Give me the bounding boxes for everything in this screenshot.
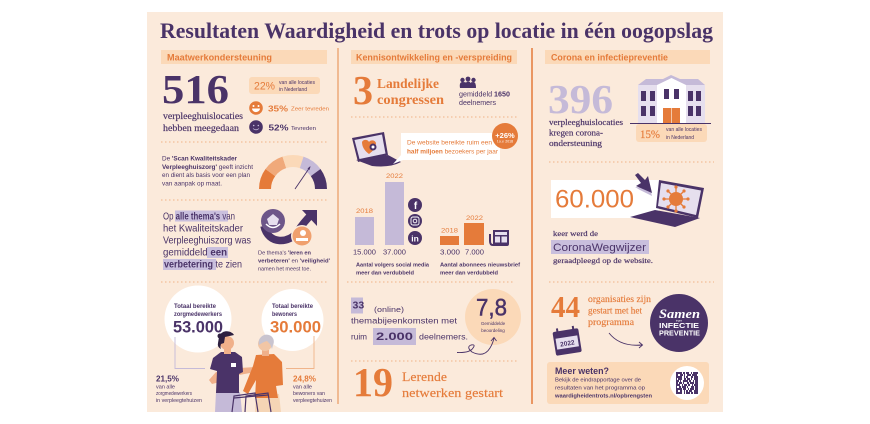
bar chart: newsletter subscribers: 2018 [441, 228, 458, 234]
icon: linkedin: in [411, 234, 419, 244]
callout: reached care workers: Totaal bereikte [174, 304, 217, 310]
panel: Kennisontwikkeling en -verspreiding [351, 50, 521, 405]
icon: facebook: f [414, 201, 418, 212]
text block: op alle thema's: Verpleeghuiszorg was [163, 234, 251, 246]
logo: Samen tegen infectiepreventie: INFECTIE [659, 321, 699, 330]
text block: theme meetings: 33 [352, 300, 364, 312]
text block: theme meetings: (online) [374, 305, 405, 314]
section heading: Corona [545, 50, 710, 64]
stat: 35 percent very satisfied: 35% [268, 104, 289, 114]
stat: 19 learning networks: Lerende [402, 369, 447, 384]
text block: op alle thema's: verbetering te zien [164, 258, 242, 270]
stat: 21,5 percent care workers: zorgmedewerkers [156, 391, 192, 397]
caption: social media: meer dan verdubbeld [356, 270, 414, 276]
section heading: Kennisontwikkeling: Kennisontwikkeling en -verspreiding [356, 52, 512, 62]
callout: meer weten: waardigheidentrots.nl/opbrengsten [554, 394, 653, 400]
icon: laptop with virus [630, 180, 704, 227]
badge: average rating 7,8: beoordeling [481, 328, 505, 333]
text block: CoronaWegwijzer: CoronaWegwijzer [553, 242, 646, 254]
QR code [670, 366, 704, 400]
callout: meer weten [547, 362, 709, 404]
stat: 24,8 percent residents [293, 374, 332, 404]
text block: scan kwaliteitskader [162, 156, 253, 188]
text block: scan kwaliteitskader: Verpleeghuiszorg' geeft inzicht [162, 164, 253, 171]
stat: 44 organisations: gestart met het [588, 306, 642, 316]
bar chart: social media followers: 37.000 [383, 250, 406, 256]
callout: reached care workers [164, 286, 232, 352]
section heading: Maatwerkondersteuning [161, 50, 327, 64]
bar chart: newsletter subscribers [440, 215, 484, 256]
text block: scan kwaliteitskader: van aanpak op maat. [162, 180, 222, 188]
callout: 15 percent: 15% [640, 127, 660, 141]
callout: reached residents [262, 289, 324, 351]
callout: meer weten: Meer weten? [555, 366, 609, 376]
stat: 21,5 percent care workers: van alle [156, 384, 175, 390]
icon: group of people [460, 77, 476, 88]
logo: Samen tegen infectiepreventie [650, 294, 708, 352]
stat: 35 percent very satisfied [268, 104, 329, 114]
badge: plus 26 percent [492, 123, 518, 149]
stat: 21,5 percent care workers: 21,5% [156, 374, 179, 384]
text block: themes that grew most: verbeteren' en 'veiligheid' [258, 258, 331, 264]
icon: very satisfied smiley [249, 101, 263, 115]
callout: 22 percent [249, 77, 320, 94]
badge: average rating 7,8 [465, 289, 521, 345]
stat: 24,8 percent residents: 24,8% [293, 374, 316, 384]
infographic background panel [147, 12, 723, 412]
icon: laptop with heart [352, 132, 401, 166]
icon: linkedin [408, 231, 422, 245]
stat: 35 percent very satisfied: Zeer tevreden [291, 106, 329, 112]
icon: instagram [408, 214, 422, 228]
bar chart: newsletter subscribers: 7.000 [465, 250, 484, 256]
stat: 60.000 [551, 180, 659, 218]
callout: 22 percent: in Nederland [279, 87, 307, 93]
icon: calendar 2022 [552, 325, 582, 356]
arrow: to logo [609, 333, 642, 348]
text block: CoronaWegwijzer: geraadpleegd op de website. [553, 256, 653, 265]
stat: 21,5 percent care workers: in verpleegtehuizen [156, 398, 202, 404]
callout: meer weten: resultaten van het programma op [555, 386, 645, 392]
stat: 19 learning networks: 19 [353, 359, 393, 405]
text block: theme meetings: 2.000 [376, 331, 413, 343]
text block: themes that grew most: De thema's 'leren en [258, 250, 311, 256]
stat: 44 organisations: 44 [551, 289, 580, 324]
stat: 3 national congresses: Landelijke [377, 77, 439, 92]
text block: CoronaWegwijzer [551, 229, 653, 265]
icon: newspaper [489, 230, 509, 246]
big number 396: kregen corona- [549, 128, 603, 138]
text block: op alle thema's: het Kwaliteitskader [163, 222, 243, 234]
callout: 15 percent: in Nederland [666, 135, 694, 141]
bar chart: newsletter subscribers: 2022 [466, 215, 483, 222]
bar chart: social media followers: 2022 [386, 173, 403, 180]
badge: plus 26 percent: +26% [495, 131, 515, 140]
bar chart: newsletter subscribers: 3.000 [440, 250, 460, 256]
big number 516: verpleeghuislocaties [163, 112, 243, 122]
caption: newsletter: meer dan verdubbeld [440, 270, 498, 276]
text block: theme meetings: themabijeenkomsten met [351, 316, 458, 326]
big number 396: 396 [548, 76, 613, 122]
text block: theme meetings: ruim [351, 332, 367, 342]
big number 516: hebben meegedaan [163, 124, 239, 134]
big number 396: verpleeghuislocaties [549, 117, 623, 127]
bar chart: social media followers [353, 173, 406, 256]
badge: plus 26 percent: t.o.v. 2018 [497, 140, 513, 144]
text block: scan kwaliteitskader: De 'Scan Kwaliteitskader [162, 156, 238, 162]
callout: reached care workers: 53.000 [173, 318, 223, 336]
stat: 24,8 percent residents: bewoners van [293, 391, 325, 397]
text block: themes that grew most [258, 250, 331, 272]
stat: 3 national congresses: 3 [353, 67, 373, 113]
stat: 44 organisations: organisaties zijn [588, 295, 651, 305]
callout: meer weten: Bekijk de eindrapportage over de [555, 378, 641, 384]
logo: Samen tegen infectiepreventie: PREVENTIE [659, 328, 700, 338]
icon: nursing home building [630, 75, 711, 124]
big number 396 [548, 76, 623, 148]
text: average participants: gemiddeld 1650 [459, 92, 510, 98]
text block: themes that grew most: namen het meest toe. [258, 266, 311, 272]
icon: satisfied smiley [249, 120, 263, 134]
text block: op alle thema's [163, 210, 251, 270]
gauge chart [265, 161, 321, 189]
text block: op alle thema's: Op alle thema's van [163, 210, 235, 222]
text block: op alle thema's: gemiddeld een [163, 246, 227, 258]
bar chart: social media followers: 15.000 [353, 250, 376, 256]
icon: facebook [408, 198, 422, 212]
stat: 3 national congresses: congressen [377, 93, 444, 108]
section heading: Corona: Corona en infectiepreventie [551, 52, 668, 62]
callout: reached residents: bewoners [272, 312, 298, 318]
caption: newsletter [440, 262, 520, 276]
callout: reached residents: Totaal bereikte [272, 304, 314, 310]
speech bubble: website visitors [393, 133, 500, 164]
logo: Samen tegen infectiepreventie: tegen [676, 320, 683, 322]
arrow: cursor pointing at laptop [635, 173, 652, 196]
speech bubble: website visitors: half miljoen bezoekers per jaar [407, 150, 498, 156]
callout: 22 percent: van alle locaties [279, 80, 316, 86]
callout: 15 percent [636, 124, 707, 142]
stat: 24,8 percent residents: verpleegtehuizen [293, 398, 332, 404]
callout: 22 percent: 22% [254, 80, 275, 92]
caption: social media [356, 262, 430, 276]
speech bubble: website visitors: De website bereikte ruim een [407, 140, 492, 146]
panel: Corona en infectiepreventie [545, 50, 711, 404]
text block: scan kwaliteitskader: en dient als basis voor een plan [162, 172, 251, 179]
callout: reached care workers: zorgmedewerkers [174, 312, 223, 318]
stat: 3 national congresses [353, 67, 444, 113]
stat: 52 percent satisfied: 52% [268, 122, 289, 132]
stat: 19 learning networks [353, 359, 503, 405]
big number 516 [162, 66, 243, 134]
arrow: swirl to rating [457, 338, 496, 354]
text: average participants [459, 92, 510, 107]
section heading: Kennisontwikkeling [351, 50, 517, 64]
text block: theme meetings [351, 298, 468, 345]
bar chart: social media followers: 2018 [356, 208, 373, 215]
text block: theme meetings: deelnemers. [419, 332, 468, 342]
text: average participants: deelnemers [459, 100, 497, 107]
stat: 44 organisations [551, 289, 651, 328]
big number 516: 516 [162, 66, 229, 112]
big number 396: ondersteuning [549, 138, 603, 148]
icon: rising arrow with themes [261, 209, 317, 247]
caption: newsletter: Aantal abonnees nieuwsbrief [440, 262, 520, 268]
badge: average rating 7,8: Gemiddelde [481, 321, 506, 326]
stat: 52 percent satisfied [268, 122, 316, 132]
stat: 52 percent satisfied: Tevreden [291, 126, 316, 132]
stat: 19 learning networks: netwerken gestart [402, 385, 503, 400]
stat: 60.000: 60.000 [555, 186, 634, 214]
stat: 21,5 percent care workers [156, 374, 202, 404]
icon: calendar 2022: 2022 [560, 339, 576, 349]
panel: Maatwerkondersteuning [156, 50, 332, 412]
section heading: Maatwerkondersteuning: Maatwerkondersteuning [167, 52, 272, 62]
badge: average rating 7,8: 7,8 [476, 294, 507, 322]
illustration: nurse and elderly resident with walker [209, 331, 283, 412]
text block: CoronaWegwijzer: keer werd de [553, 229, 599, 238]
stat: 44 organisations: programma [588, 318, 635, 328]
title: Resultaten Waardigheid en trots op locatie in één oogopslag [160, 18, 713, 43]
logo: Samen tegen infectiepreventie: Samen [659, 306, 700, 321]
stat: 24,8 percent residents: van alle [293, 384, 312, 390]
caption: social media: Aantal volgers social media [356, 262, 430, 268]
callout: reached residents: 30.000 [270, 318, 321, 336]
callout: 15 percent: van alle locaties [666, 127, 703, 133]
